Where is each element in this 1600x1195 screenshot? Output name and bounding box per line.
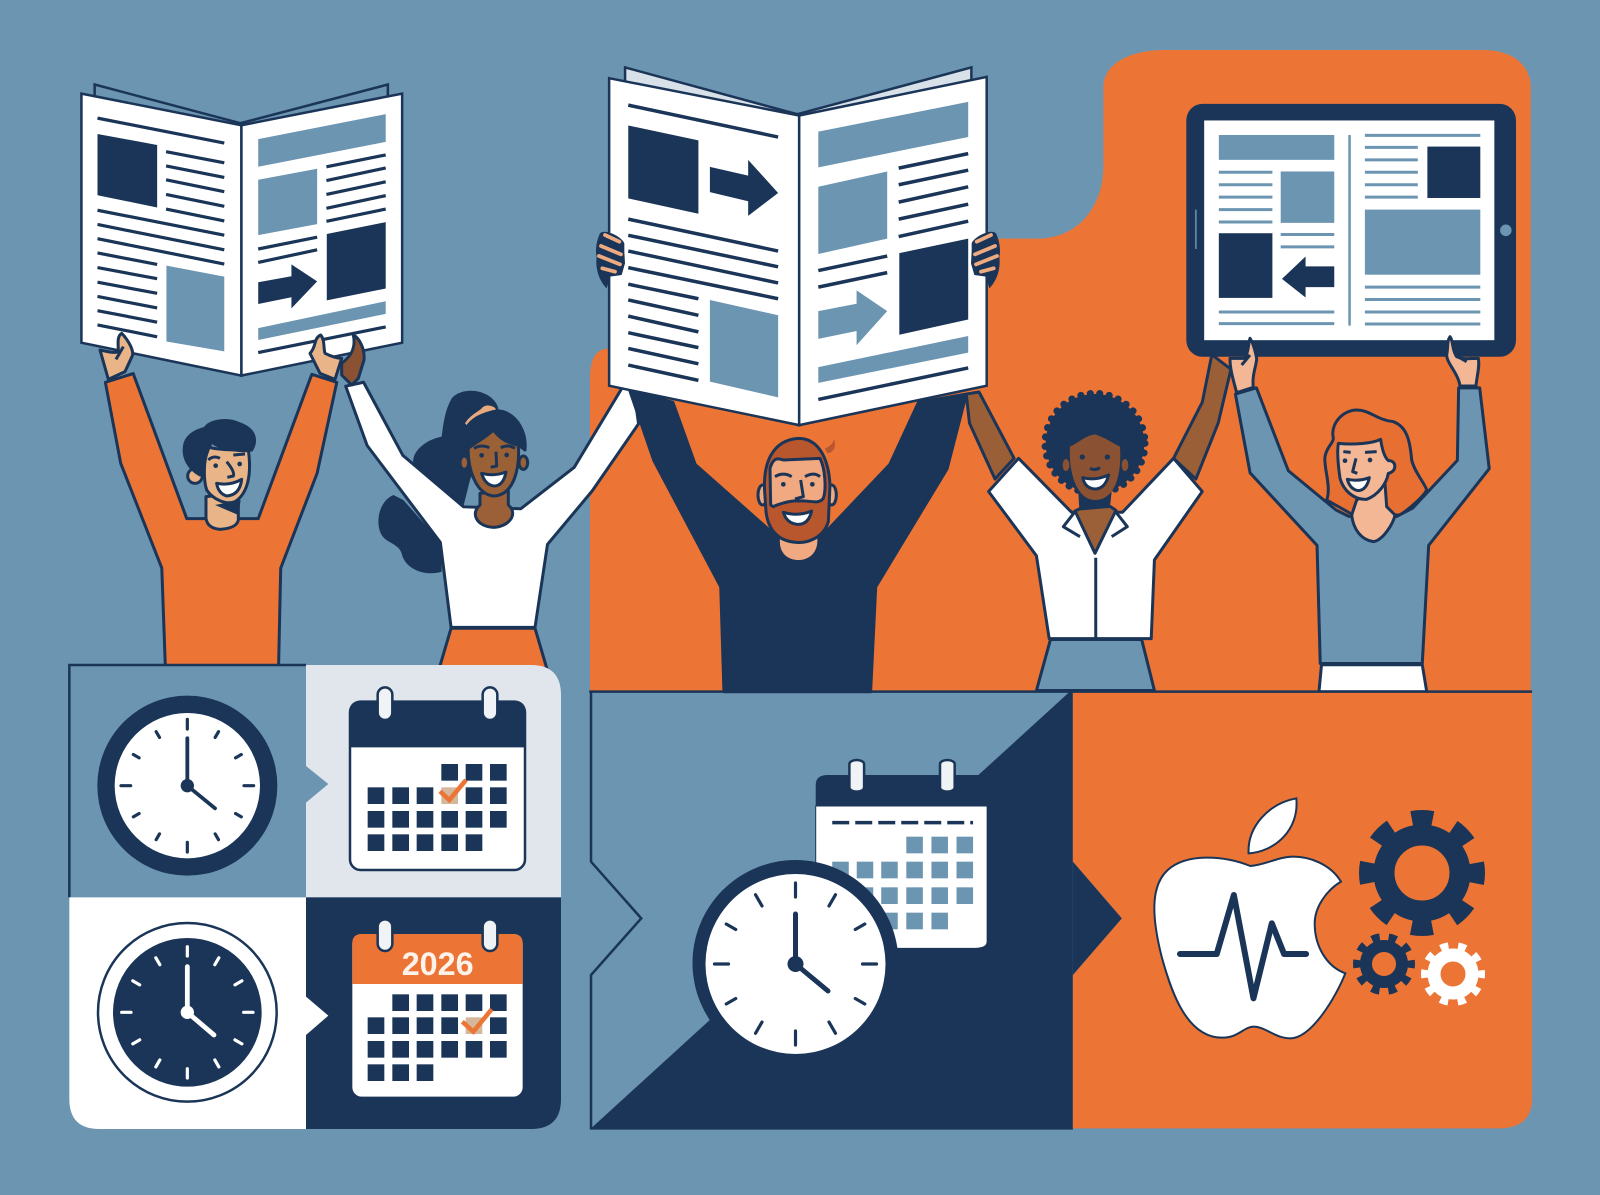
icon: apple with pulse line <box>1154 798 1345 1038</box>
quadrant: navy with 2026 calendar <box>306 897 561 1129</box>
person: woman with afro in white shirt <box>966 355 1231 690</box>
person: man in orange sweater <box>105 374 337 667</box>
person: woman in white top <box>346 372 639 677</box>
hands: holding left newspaper <box>100 333 364 385</box>
newspaper: centre open spread <box>609 67 987 425</box>
calendar year label: 2026 <box>402 946 474 982</box>
quadrant: white with dark clock <box>69 897 306 1129</box>
hand: gripping left edge of centre newspaper <box>596 232 625 288</box>
icon: centre calendar <box>816 760 987 948</box>
icon: large navy gear <box>1367 818 1477 928</box>
navy diagonal background <box>591 692 1073 1128</box>
hands: holding tablet <box>1230 337 1479 393</box>
person: bearded man in navy sweater <box>630 390 966 692</box>
tablet <box>1186 104 1516 357</box>
quadrant: pale with calendar <box>306 665 561 897</box>
panel: orange backdrop <box>590 50 1531 690</box>
quadrant: blue with clock <box>69 665 306 897</box>
panel: clocks and calendars quadrant <box>69 665 561 1129</box>
icon: centre clock <box>692 860 898 1066</box>
panel: bottom centre clock and calendar <box>591 692 1073 1128</box>
hand: gripping right edge of centre newspaper <box>971 232 1000 288</box>
icon: small white gear <box>1425 946 1481 1002</box>
person: red-haired woman in blue sweater <box>1235 388 1489 692</box>
panel: orange health and gears <box>589 692 1532 1128</box>
icon: small navy gear <box>1357 937 1411 991</box>
newspaper: left open spread <box>81 85 402 376</box>
